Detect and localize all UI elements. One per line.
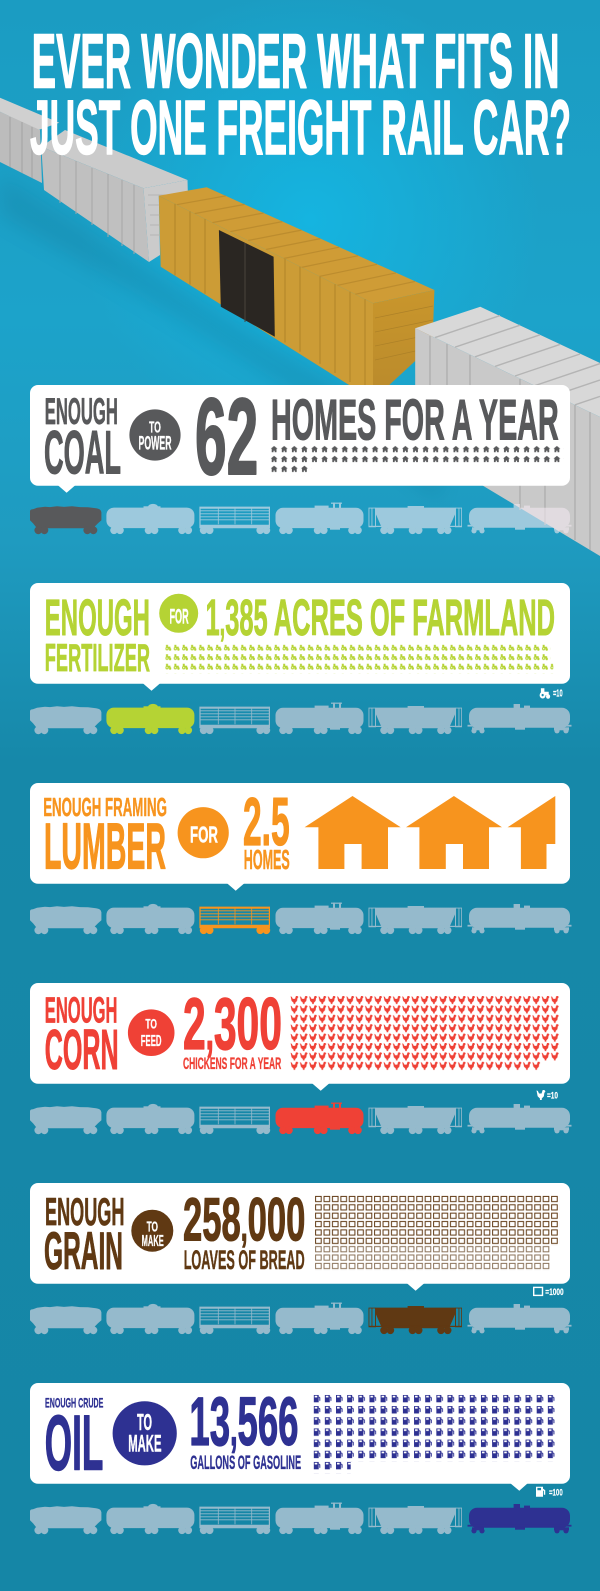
figure: 258,000 loaves — [183, 1186, 305, 1275]
panel: coal: COAL — [44, 418, 121, 487]
speech bubble — [30, 385, 570, 493]
car shadow — [0, 175, 440, 500]
panel: corn — [30, 983, 572, 1134]
front gray rail car — [415, 307, 600, 556]
far gray rail car — [0, 98, 59, 183]
heading: enough framing lumber: ENOUGH FRAMING — [43, 792, 167, 822]
badge: to power — [129, 409, 181, 461]
highlighted coal car — [30, 506, 101, 534]
speech bubble — [30, 583, 570, 691]
panel: grain — [30, 1183, 572, 1334]
train: oil car highlighted — [30, 1503, 572, 1534]
panel: corn: CORN — [45, 1019, 119, 1082]
panel: lumber: LUMBER — [44, 809, 166, 882]
figure: 2.5 homes — [243, 785, 290, 875]
figure: 2,300 chickens: CHICKENS FOR A YEAR — [183, 1055, 281, 1073]
legend: tractor = 10 — [540, 688, 563, 700]
legend: pump = 100: =100 — [549, 1488, 563, 1499]
highlighted oil car — [468, 1504, 572, 1533]
panel: grain: LOAVES OF BREAD — [184, 1245, 305, 1275]
badge: to power: TO — [149, 420, 161, 437]
legend: chicken = 10 — [536, 1090, 558, 1101]
yellow boxcar — [159, 187, 434, 400]
badge: for: FOR — [190, 822, 218, 848]
panel: fertilizer — [30, 583, 572, 734]
train: tank car highlighted — [30, 703, 572, 734]
badge: to power: POWER — [138, 433, 172, 454]
panel: grain: ENOUGH — [45, 1191, 124, 1234]
badge: to feed: FEED — [141, 1033, 162, 1050]
pictogram: chickens — [290, 996, 560, 1071]
panel: corn: ENOUGH — [45, 990, 117, 1031]
badge: to feed — [128, 1009, 174, 1056]
highlighted grain car — [368, 1306, 462, 1334]
figure: 2,300 chickens — [183, 984, 282, 1073]
panel: lumber: HOMES — [244, 844, 290, 875]
panel: crude oil: OIL — [45, 1398, 103, 1486]
speech bubble — [30, 1383, 570, 1491]
title — [30, 18, 571, 171]
illustration: freight rail cars — [0, 98, 600, 556]
badge: for: FOR — [170, 605, 189, 628]
badge: to make: MAKE — [142, 1233, 164, 1250]
panel: fertilizer: ENOUGH — [45, 589, 150, 646]
boxcar door — [219, 230, 275, 337]
pictogram: gas pumps — [314, 1395, 559, 1473]
train: coal car highlighted — [30, 503, 572, 534]
heading: enough crude oil: ENOUGH CRUDE — [45, 1395, 103, 1411]
figure: 13,566 gallons — [189, 1384, 301, 1474]
legend: loaf = 1000: =1000 — [545, 1287, 564, 1298]
badge: to feed: TO — [145, 1015, 157, 1031]
legend: pump = 100 — [536, 1487, 563, 1499]
pictogram: houses — [271, 446, 564, 475]
badge: to make — [113, 1401, 177, 1465]
legend: tractor = 10: =10 — [553, 688, 563, 700]
panel: grain: GRAIN — [44, 1222, 123, 1281]
badge: to make: TO — [137, 1409, 152, 1435]
pictogram: 2.5 houses — [305, 796, 555, 869]
heading: enough coal — [44, 391, 121, 487]
badge: for — [178, 807, 229, 858]
heading: enough framing lumber — [43, 792, 167, 882]
figure: 258,000 loaves: 258,000 — [183, 1186, 305, 1255]
pictogram: tractors — [165, 645, 553, 673]
speech bubble — [30, 983, 570, 1091]
panel: fertilizer: FERTILIZER — [45, 637, 150, 680]
figure: 2,300 chickens: 2,300 — [183, 984, 282, 1065]
panel: crude oil — [30, 1383, 572, 1534]
figure: 13,566 gallons: 13,566 — [189, 1384, 298, 1460]
figure: 62 homes for a year: 62 — [195, 376, 258, 498]
panel: lumber — [30, 783, 572, 934]
heading: enough crude oil — [45, 1395, 103, 1486]
legend: chicken = 10: =10 — [547, 1090, 558, 1101]
badge: to make: TO — [147, 1219, 158, 1236]
speech bubble — [30, 1183, 570, 1291]
legend: loaf = 1000 — [534, 1287, 564, 1298]
panel: coal: ENOUGH — [45, 391, 118, 432]
middle gray rail car — [41, 130, 188, 262]
highlighted corn car — [276, 1103, 364, 1134]
badge: for — [159, 594, 198, 633]
heading: enough fertilizer — [45, 589, 150, 680]
heading: enough corn — [45, 990, 119, 1082]
highlighted fertilizer car — [106, 704, 194, 734]
pictogram: loaves — [315, 1196, 560, 1271]
badge: to make — [131, 1210, 173, 1252]
train: grain car highlighted — [30, 1303, 572, 1334]
panel: coal — [30, 376, 572, 534]
badge: to make: MAKE — [128, 1431, 162, 1458]
train: lumber car highlighted — [30, 903, 572, 934]
panel: lumber: 2.5 — [243, 785, 290, 860]
speech bubble — [30, 783, 570, 891]
highlighted lumber car — [199, 907, 270, 934]
heading: enough grain — [44, 1191, 124, 1281]
figure: 62 homes for a year — [195, 376, 559, 498]
train: corn car highlighted — [30, 1103, 572, 1134]
panel: crude oil: GALLONS OF GASOLINE — [190, 1452, 301, 1474]
